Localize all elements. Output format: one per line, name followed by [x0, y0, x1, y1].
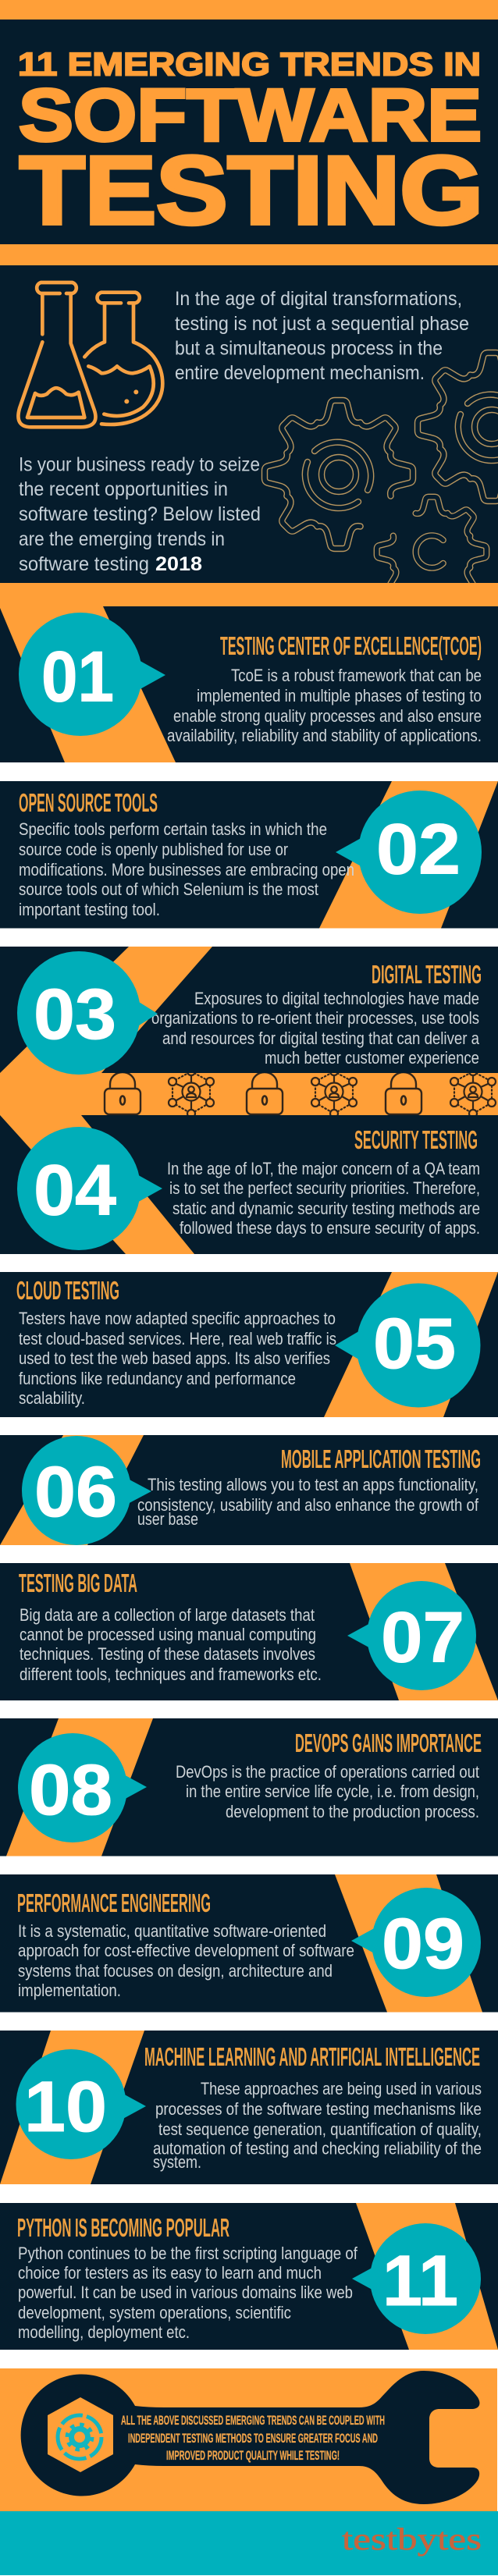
- body text: [18, 2244, 358, 2342]
- body text: approach for cost-effective development of software: [18, 1941, 354, 1960]
- number badge 04: 04: [34, 1150, 116, 1230]
- number badge 01: 01: [41, 637, 114, 716]
- number badge 07: 07: [381, 1598, 464, 1678]
- panel: 05 cloud testing: CLOUD TESTING: [16, 1277, 119, 1306]
- panel: 11 python is becoming popular: PYTHON IS BECOMING POPULAR: [17, 2214, 229, 2243]
- panel: 02 open source tools: OPEN SOURCE TOOLS: [19, 789, 158, 818]
- number badge 05: 05: [373, 1304, 456, 1384]
- number badge 08: [18, 1733, 147, 1842]
- intro paragraph 2: Is your business ready to seize: [19, 454, 260, 476]
- body text: source code is openly published for use or: [19, 840, 288, 859]
- body text: [167, 666, 482, 745]
- title line 3: TESTING: [20, 137, 483, 245]
- number badge 08: 08: [29, 1750, 112, 1830]
- panel: 09 performance engineering: [0, 1874, 498, 2012]
- body text: different tools, techniques and frameworks etc.: [20, 1665, 322, 1684]
- body text: [19, 819, 354, 919]
- intro paragraph 1: [175, 288, 469, 384]
- bottom accent bar: [0, 244, 498, 265]
- title line 2: SOFTWARE: [19, 74, 482, 157]
- top accent bar: [0, 0, 498, 20]
- icon: lock: [247, 1072, 283, 1114]
- intro paragraph 2: are the emerging trends in: [19, 528, 225, 550]
- body text: modifications. More businesses are embracing open: [19, 860, 354, 879]
- number badge 06: [22, 1436, 151, 1545]
- panel: 01 testing center of excellence: [0, 606, 498, 762]
- icon: lock: [105, 1072, 141, 1114]
- panel: 04 security testing: [0, 1115, 498, 1254]
- body text: functions like redundancy and performance: [19, 1369, 296, 1388]
- icon: network: [169, 1068, 214, 1117]
- panel: 11 python is becoming popular: [0, 2203, 498, 2350]
- intro paragraph 1: but a simultaneous process in the: [175, 337, 443, 359]
- number badge 04: [17, 1127, 162, 1250]
- number badge 10: 10: [24, 2067, 107, 2147]
- panel: conclusion with wrench: [0, 2368, 497, 2511]
- footer bar: [0, 2511, 498, 2575]
- body text: user base: [137, 1509, 198, 1529]
- number badge 09: 09: [382, 1904, 464, 1984]
- number badge 10: [16, 2049, 146, 2159]
- panel: introduction: [0, 265, 498, 606]
- body text: [151, 989, 479, 1068]
- body text: Specific tools perform certain tasks in which the: [19, 819, 327, 839]
- closing message: IMPROVED PRODUCT QUALITY WHILE TESTING!: [166, 2448, 340, 2463]
- orange band above section 1: [0, 583, 498, 606]
- icon: network: [311, 1068, 357, 1117]
- number badge 03: [17, 951, 158, 1075]
- number badge 02: [336, 791, 482, 914]
- icon: lock: [386, 1072, 422, 1114]
- panel: header: [0, 0, 498, 265]
- body text: [19, 1309, 336, 1408]
- icon: network: [450, 1068, 496, 1117]
- icon: gear in hexagon: [48, 2397, 113, 2472]
- closing message: [121, 2413, 385, 2463]
- body text: Testers have now adapted specific approaches to: [19, 1309, 336, 1328]
- intro paragraph 2: 2018: [155, 553, 202, 575]
- body text: It is a systematic, quantitative software-oriented: [18, 1921, 326, 1941]
- body text: cannot be processed using manual computing: [20, 1625, 316, 1644]
- intro paragraph 2: the recent opportunities in: [19, 478, 228, 500]
- panel: 08 devops gains importance: [0, 1718, 498, 1856]
- number badge 07: [347, 1581, 476, 1690]
- number badge 01: [19, 613, 165, 736]
- brand name: testbytes: [342, 2521, 482, 2556]
- icon: flasks: [18, 282, 162, 427]
- panel: 10 machine learning and artificial intelligence: [0, 2031, 498, 2184]
- number badge 11: [352, 2223, 481, 2334]
- wrench shape: [21, 2371, 479, 2504]
- body text: important testing tool.: [19, 900, 160, 919]
- body text: used to test the web based apps. Its also verifies: [19, 1348, 330, 1368]
- number badge 09: [351, 1888, 481, 1997]
- body text: development, system operations, scientific: [18, 2303, 291, 2322]
- intro paragraph 2: software testing? Below listed: [19, 503, 261, 525]
- intro paragraph 1: entire development mechanism.: [175, 362, 425, 384]
- body text: Python continues to be the first scripting language of: [18, 2244, 358, 2263]
- body text: [167, 1159, 480, 1238]
- orange band with lock and network icons: [0, 1068, 498, 1117]
- body text: modelling, deployment etc.: [18, 2322, 190, 2342]
- body text: [153, 2079, 482, 2172]
- number badge 06: 06: [34, 1452, 117, 1532]
- body text: systems that focuses on design, architecture and: [18, 1961, 333, 1981]
- panel: 05 cloud testing: [0, 1272, 498, 1417]
- body text: source tools out of which Selenium is the most: [19, 879, 319, 899]
- body text: Big data are a collection of large datasets that: [20, 1605, 315, 1625]
- panel: 02 open source tools: [0, 781, 498, 929]
- body text: [137, 1475, 479, 1529]
- body text: scalability.: [19, 1388, 85, 1408]
- body text: [20, 1605, 322, 1684]
- panel: 09 performance engineering: PERFORMANCE ENGINEERING: [17, 1889, 211, 1918]
- body text: [176, 1762, 480, 1821]
- intro paragraph 2: [19, 454, 261, 575]
- body text: system.: [153, 2152, 201, 2172]
- body text: techniques. Testing of these datasets involves: [20, 1644, 315, 1664]
- body text: [18, 1921, 354, 2000]
- body text: implementation.: [18, 1981, 121, 2000]
- body text: test cloud-based services. Here, real web traffic is: [19, 1329, 336, 1348]
- decorative gears: [265, 353, 498, 606]
- panel: 07 testing big data: TESTING BIG DATA: [19, 1569, 137, 1598]
- number badge 05: [335, 1283, 481, 1408]
- intro paragraph 1: testing is not just a sequential phase: [175, 313, 469, 335]
- panel: 07 testing big data: [0, 1563, 498, 1700]
- number badge 02: 02: [376, 810, 461, 890]
- panel: 06 mobile application testing: [0, 1435, 498, 1545]
- body text: choice for testers as its easy to learn and much: [18, 2263, 322, 2283]
- panel: 03 digital testing: [0, 947, 498, 1075]
- number badge 03: 03: [34, 975, 116, 1054]
- body text: powerful. It can be used in various domains like web: [18, 2283, 353, 2302]
- number badge 11: 11: [382, 2241, 458, 2321]
- title line 1: 11 EMERGING TRENDS IN: [18, 45, 481, 83]
- intro paragraph 2: software testing: [19, 553, 149, 575]
- intro paragraph 1: In the age of digital transformations,: [175, 288, 462, 310]
